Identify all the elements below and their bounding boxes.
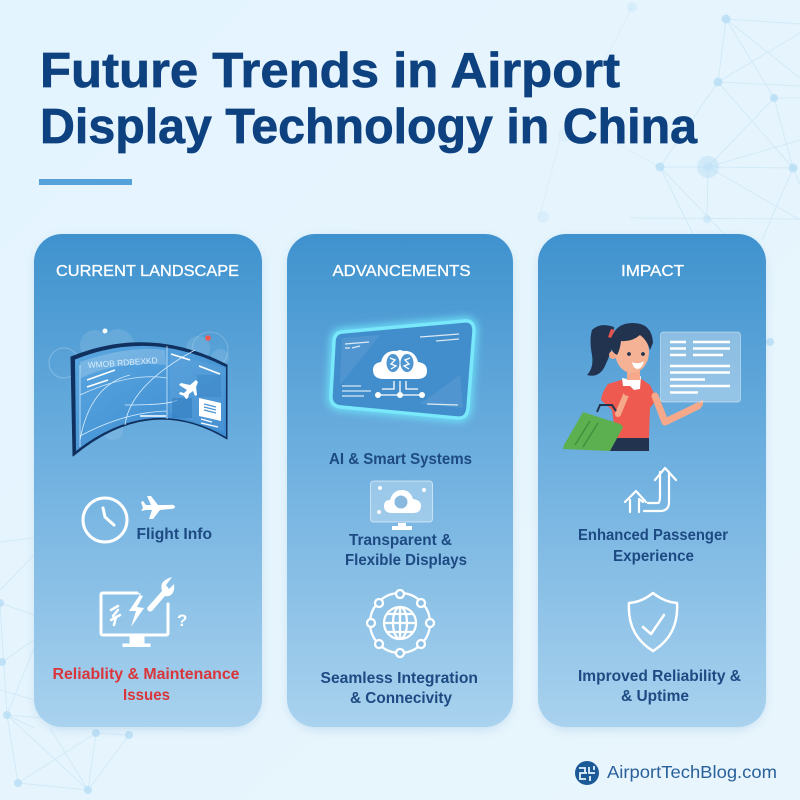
icon: transparent monitor: [370, 481, 432, 530]
label: enhanced passenger experience: [578, 527, 728, 565]
icon: glowing AI display: [331, 321, 474, 418]
panel: impact: [538, 234, 766, 729]
label: seamless integration and connectivity: Seamless Integration: [320, 670, 478, 687]
label: reliability and maintenance issues: Issues: [123, 687, 170, 704]
icon: clock: [83, 498, 127, 542]
info panel: [660, 332, 740, 402]
label: reliability and maintenance issues: [52, 666, 240, 704]
label: AI and smart systems: AI & Smart Systems: [329, 451, 472, 468]
title: Future Trends in Airport: [40, 44, 620, 98]
panel: current landscape: [34, 234, 262, 729]
icon: globe network: [367, 590, 434, 657]
label: improved reliability and uptime: [578, 668, 741, 705]
footer site name: AirportTechBlog.com: [607, 762, 777, 782]
icon: shield with check: [629, 593, 677, 651]
label: enhanced passenger experience: Enhanced Passenger: [578, 527, 728, 544]
label: seamless integration and connectivity: [320, 670, 478, 707]
icon: plane: [141, 496, 175, 519]
title: [40, 44, 698, 154]
title accent bar: [39, 179, 132, 185]
label: improved reliability and uptime: & Uptime: [621, 688, 689, 705]
icon: house with upward arrow: [625, 468, 676, 512]
label: improved reliability and uptime: Improved Reliability &: [578, 668, 741, 685]
heading: current landscape: CURRENT LANDSCAPE: [56, 263, 239, 280]
panel: advancements: [287, 234, 513, 729]
label: enhanced passenger experience: Experience: [613, 548, 694, 565]
icon: curved flight display: WMOB RDBEXKD: [87, 355, 158, 370]
label: transparent and flexible displays: Flexible Displays: [345, 552, 467, 569]
footer logo: AirportTechBlog mark: [575, 761, 599, 785]
label: transparent and flexible displays: [345, 532, 467, 569]
label: transparent and flexible displays: Transparent &: [349, 532, 452, 549]
title: Display Technology in China: [40, 100, 698, 154]
label: seamless integration and connectivity: & Connecivity: [350, 690, 452, 707]
icon: broken monitor with wrench: ?: [177, 611, 187, 630]
illustration: passenger with suitcase and info panel: [563, 323, 740, 451]
label: reliability and maintenance issues: Reliablity & Maintenance: [52, 666, 240, 683]
heading: advancements: ADVANCEMENTS: [332, 263, 470, 280]
heading: impact: IMPACT: [621, 263, 685, 280]
icon: curved flight display: [49, 328, 229, 456]
icon: broken monitor with wrench: [101, 577, 187, 646]
label: flight info: Flight Info: [136, 526, 212, 543]
